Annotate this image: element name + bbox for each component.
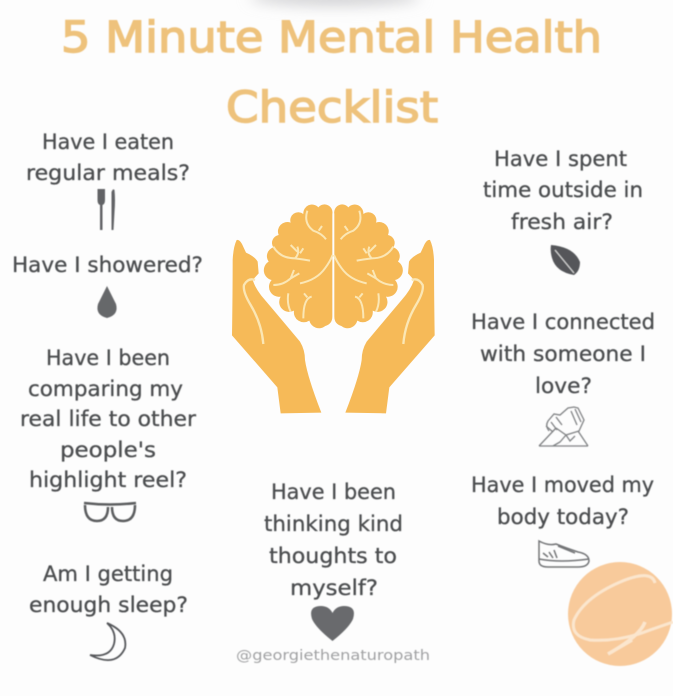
credit handle: @georgiethenaturopath: [236, 648, 430, 664]
right column: connection question: [471, 310, 655, 398]
left column: meals question: Have I eaten: [42, 130, 174, 154]
left column: sleep question: [29, 562, 188, 617]
left column: shower question: Have I showered?: [12, 253, 203, 277]
right column: movement question: Have I moved my: [471, 473, 654, 497]
left column: comparing question: people's: [60, 438, 156, 462]
left column: comparing question: highlight reel?: [29, 468, 187, 492]
illustration: hands holding brain: [232, 204, 435, 413]
icon: heart: [311, 606, 354, 641]
logo: peach signature circle: [568, 562, 673, 666]
center: kind thoughts question: thoughts to: [269, 544, 397, 568]
center: kind thoughts question: myself?: [290, 576, 378, 600]
center: kind thoughts question: thinking kind: [264, 512, 403, 536]
left column: comparing question: real life to other: [20, 407, 196, 431]
icon: running shoe: [539, 541, 589, 567]
right column: outside question: [483, 147, 643, 234]
right column: outside question: fresh air?: [511, 210, 613, 234]
right column: outside question: time outside in: [483, 178, 643, 202]
right column: movement question: [471, 473, 654, 529]
left column: meals question: regular meals?: [26, 161, 190, 185]
left column: sleep question: Am I getting: [43, 562, 173, 586]
right column: connection question: with someone I: [480, 342, 646, 366]
left column: sleep question: enough sleep?: [29, 593, 188, 617]
left column: comparing question: comparing my: [28, 377, 183, 401]
title: 5 Minute Mental Health: [61, 13, 602, 63]
left column: comparing question: Have I been: [46, 346, 170, 370]
right column: outside question: Have I spent: [494, 147, 627, 171]
left column: meals question: [26, 130, 190, 185]
right column: connection question: love?: [535, 374, 592, 398]
icon: glasses: [84, 503, 136, 521]
right column: movement question: body today?: [497, 505, 629, 529]
right column: connection question: Have I connected: [471, 310, 655, 334]
brain right hemisphere: [334, 204, 403, 328]
right hand: [345, 240, 435, 413]
icon: water drop: [97, 286, 117, 318]
icon: clasped hands: [539, 407, 588, 446]
icon: crescent moon: [90, 623, 125, 660]
left column: comparing question: [20, 346, 196, 492]
icon: fork and knife: [98, 189, 115, 230]
left hand: [232, 240, 321, 413]
center: kind thoughts question: Have I been: [271, 480, 396, 504]
title: [61, 13, 602, 133]
center: kind thoughts question: [264, 480, 403, 600]
title: Checklist: [226, 83, 438, 133]
icon: leaf: [551, 245, 580, 275]
brain left hemisphere: [264, 204, 333, 328]
